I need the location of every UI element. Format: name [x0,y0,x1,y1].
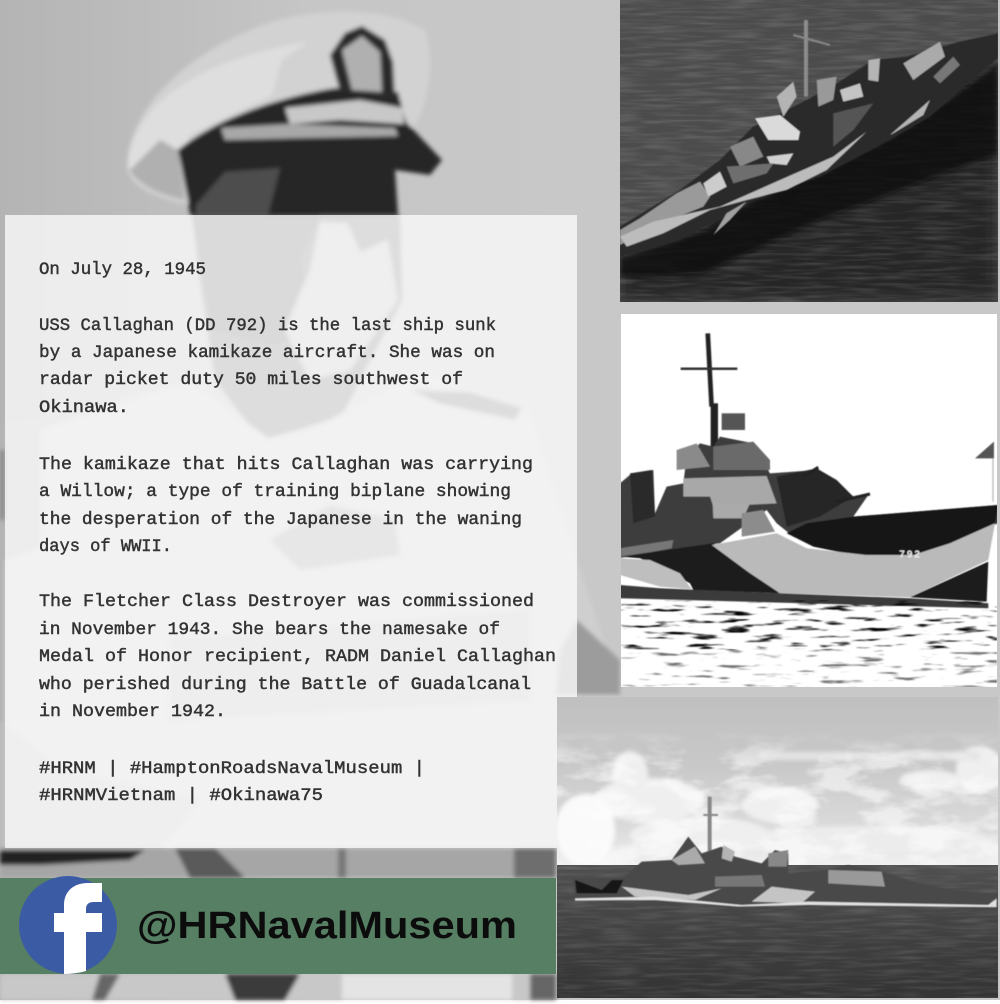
cap crown [127,12,430,203]
text block: paragraph three: in November 1942. [39,703,226,722]
icon: facebook logo [19,876,117,974]
banner: social media handle [0,876,556,974]
lower portrait [0,848,556,878]
cap white strip [285,100,404,124]
cap band and visor with shaded face [178,88,442,215]
uniform [5,370,620,848]
photo: destroyer hull number 792 [620,314,998,687]
text block: paragraph three [39,593,556,722]
face [192,215,402,440]
text block: paragraph one [39,317,496,418]
text block: paragraph three: Medal of Honor recipient, RADM Daniel Callaghan [39,648,556,667]
text block: paragraph two: the desperation of the Japanese in the waning [39,511,522,530]
text block: paragraph three: who perished during the Battle of Guadalcanal [39,676,531,695]
text block: paragraph two: The kamikaze that hits Callaghan was carrying [39,456,533,475]
photo: destroyer hull number 792: 792 [899,549,920,560]
text block: hashtags: #HRNMVietnam | #Okinawa75 [39,787,323,806]
text block: paragraph one: Okinawa. [39,399,129,418]
text block: hashtags [39,760,425,806]
text block: paragraph two: days of WWII. [39,538,172,557]
text block: paragraph one: USS Callaghan (DD 792) is the last ship sunk [39,317,496,336]
cap badge [330,26,395,100]
photo: destroyer under way at sea [555,697,1000,998]
text block: paragraph three: in November 1943. She bears the namesake of [39,621,500,640]
text block: paragraph one: radar picket duty 50 miles southwest of [39,371,463,390]
panel: translucent text card [5,215,577,848]
text block: paragraph two: a Willow; a type of training biplane showing [39,483,511,502]
text: date line: On July 28, 1945 [39,261,206,280]
hair under the visor [196,168,280,215]
text: Facebook handle: @HRNavalMuseum [137,905,517,947]
text block: paragraph one: by a Japanese kamikaze aircraft. She was on [39,344,495,363]
text block: paragraph three: The Fletcher Class Destroyer was commissioned [39,593,534,612]
text block: paragraph two [39,456,533,557]
text block: hashtags: #HRNM | #HamptonRoadsNavalMuseum | [39,760,425,779]
photo: aerial view of destroyer [620,0,998,302]
cap braid [221,124,398,140]
